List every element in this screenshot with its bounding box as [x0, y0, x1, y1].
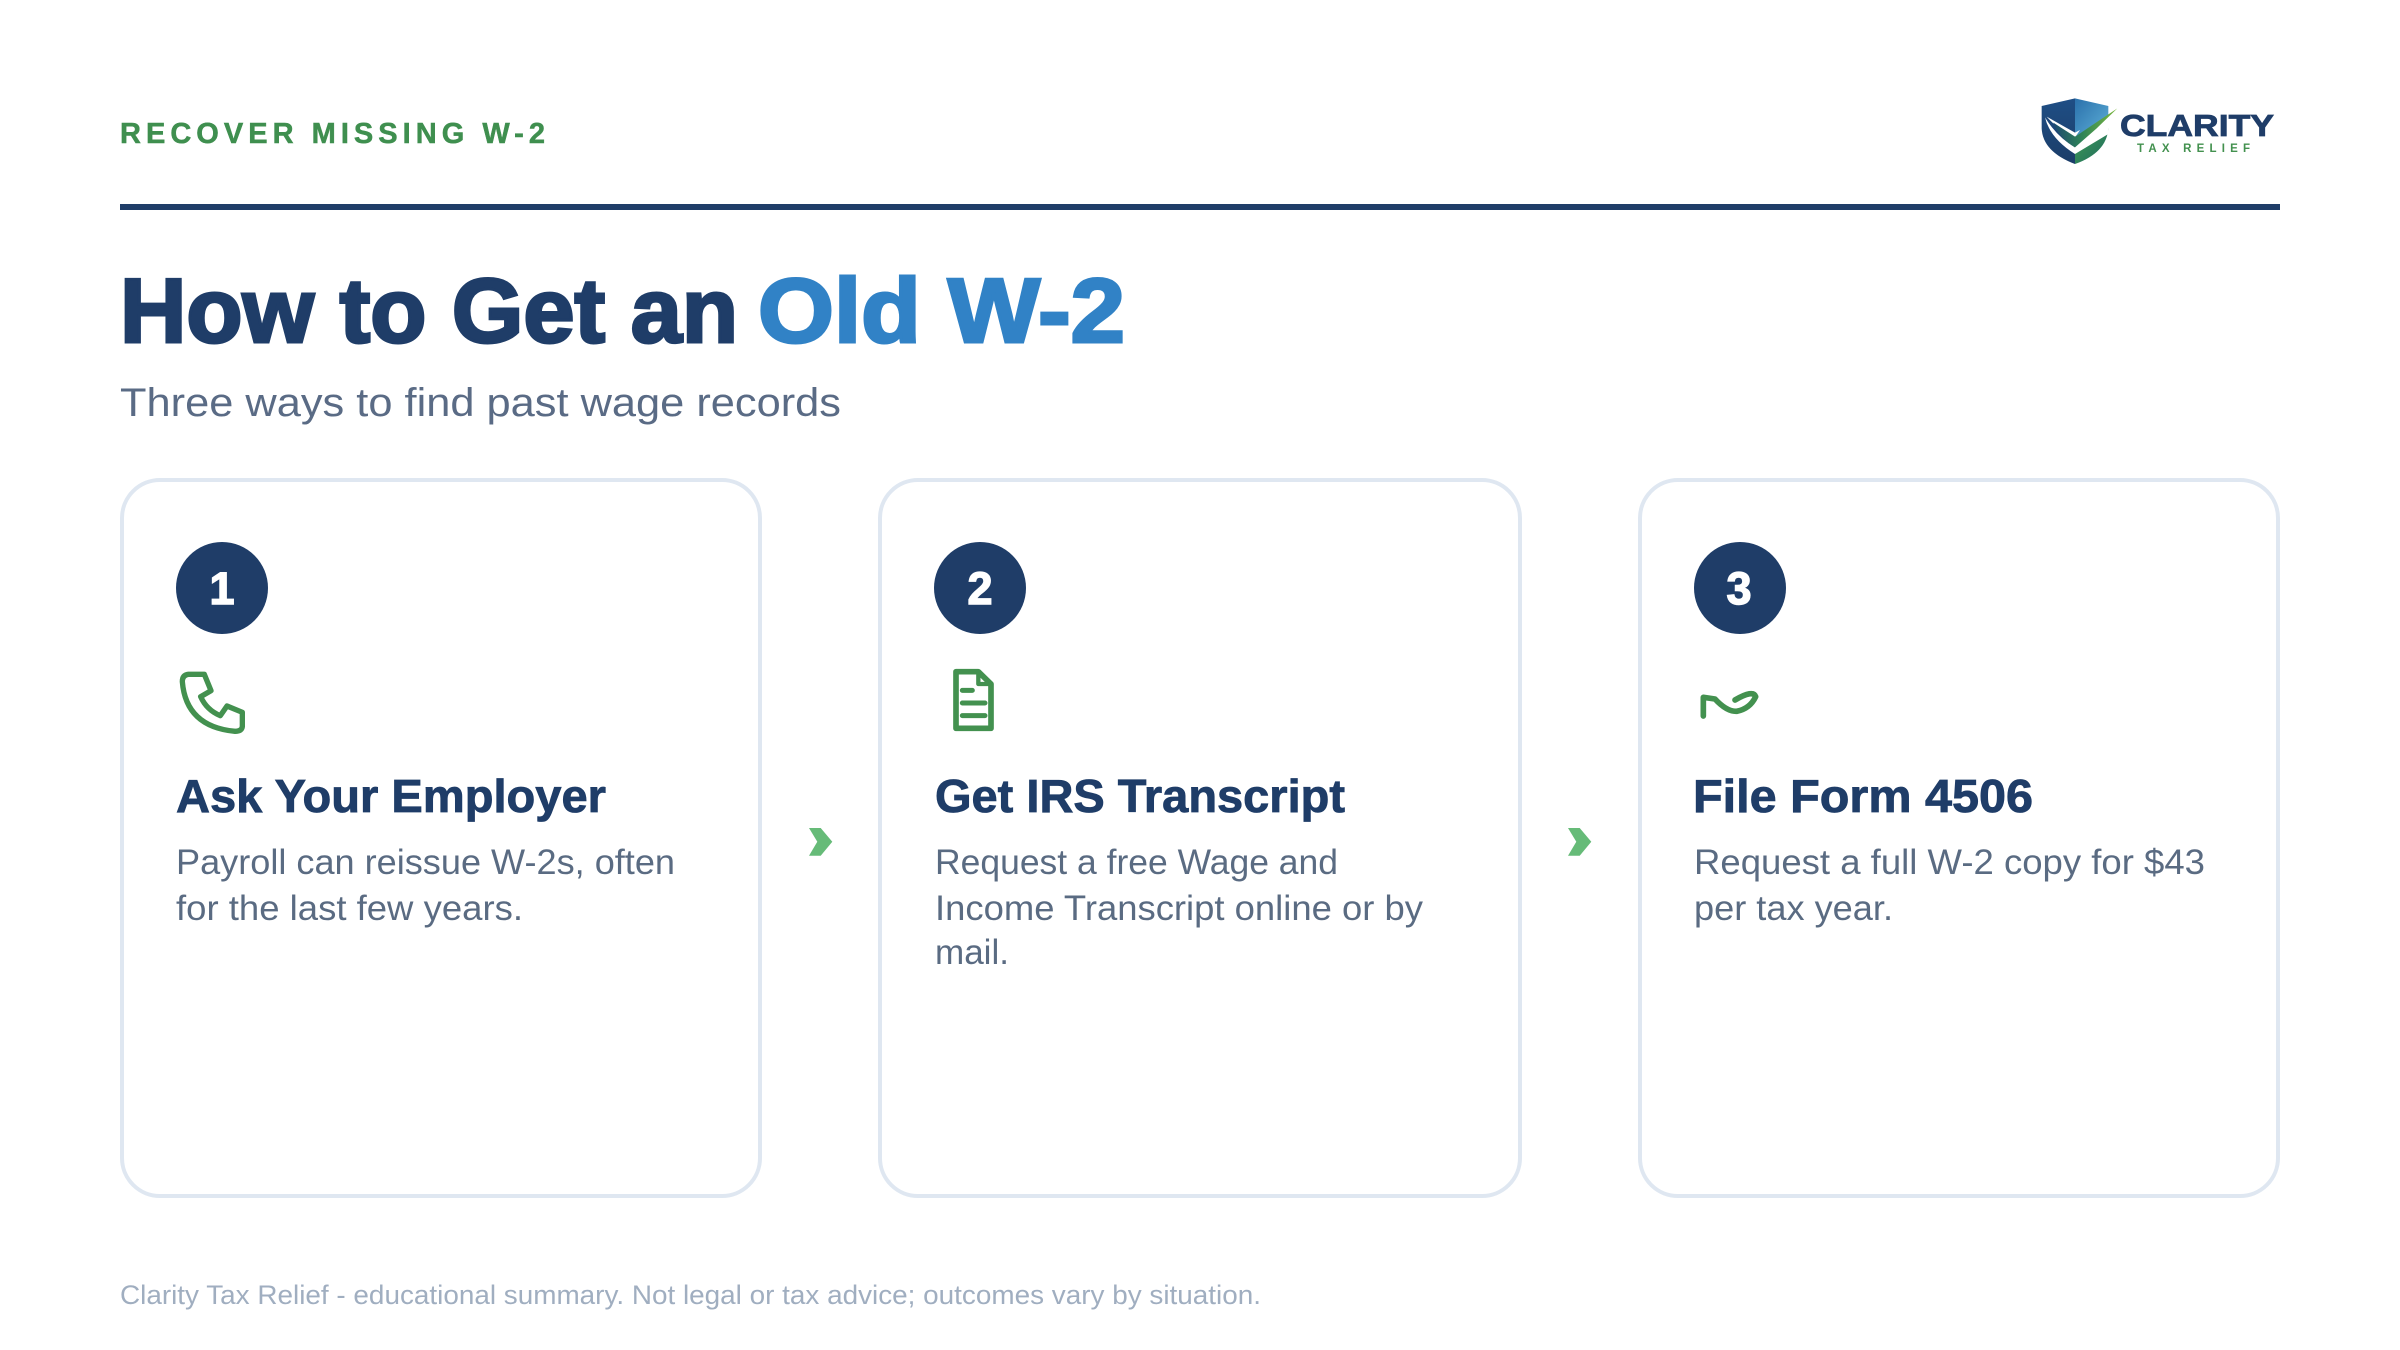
- subtitle: Three ways to find past wage records: [120, 381, 841, 425]
- step description: [1694, 843, 2205, 928]
- step number 2: [934, 542, 1026, 634]
- step description: [935, 843, 1424, 972]
- step heading: File Form 4506: [1693, 770, 2033, 822]
- logo wordmark: CLARITY: [2120, 108, 2274, 143]
- step number 1: 1: [209, 563, 235, 614]
- step description: Income Transcript online or by: [935, 889, 1424, 928]
- title: How to Get an: [120, 261, 738, 362]
- title: [120, 261, 1125, 362]
- step description: for the last few years.: [176, 889, 523, 928]
- panel: step 3 File Form 4506: [1640, 480, 2278, 1196]
- step description: Payroll can reissue W-2s, often: [176, 843, 675, 882]
- logo: Clarity Tax Relief: [2042, 98, 2274, 164]
- step heading: Get IRS Transcript: [935, 770, 1345, 822]
- step number 3: 3: [1726, 563, 1752, 614]
- panel: step 2 Get IRS Transcript: [880, 480, 1520, 1196]
- step number 2: 2: [967, 563, 993, 614]
- panel: step 1 Ask Your Employer: [122, 480, 760, 1196]
- icon: signature squiggle: [1703, 694, 1756, 716]
- step description: per tax year.: [1694, 889, 1893, 928]
- icon: shield with check: [2042, 98, 2117, 164]
- logo tagline: TAX RELIEF: [2137, 143, 2250, 155]
- header rule: [120, 204, 2280, 210]
- icon: document: [956, 672, 991, 728]
- step description: mail.: [935, 933, 1009, 972]
- step description: Request a full W-2 copy for $43: [1694, 843, 2205, 882]
- arrow: step 2 to 3: [1568, 828, 1591, 856]
- arrow: step 1 to 2: [809, 828, 832, 856]
- step description: [176, 843, 675, 928]
- step number 1: [176, 542, 268, 634]
- title: Old W-2: [758, 261, 1125, 362]
- footer disclaimer: Clarity Tax Relief - educational summary. Not legal or tax advice; outcomes vary by situation.: [120, 1280, 1261, 1310]
- step heading: Ask Your Employer: [176, 770, 606, 822]
- icon: phone: [182, 674, 242, 731]
- step number 3: [1694, 542, 1786, 634]
- eyebrow label: RECOVER MISSING W-2: [120, 118, 545, 150]
- step description: Request a free Wage and: [935, 843, 1338, 882]
